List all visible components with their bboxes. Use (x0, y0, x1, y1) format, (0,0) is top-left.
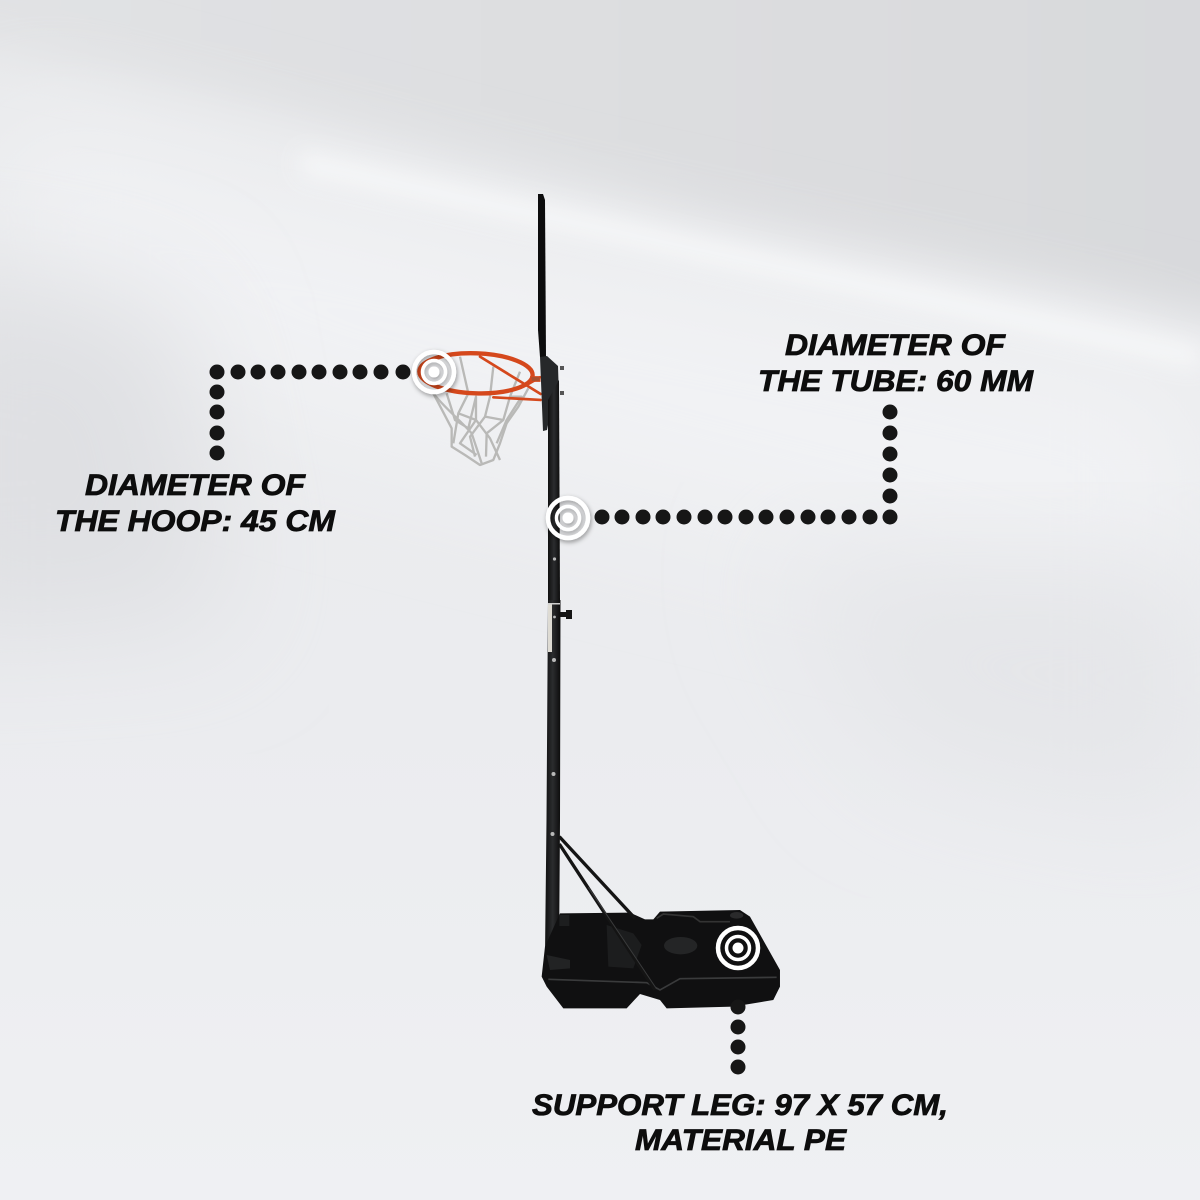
text: hoop diameter: THE HOOP: 45 CM (55, 505, 336, 538)
dotted leader: tube (594, 404, 898, 524)
icon: pole bolts (550, 557, 556, 836)
callout: diameter of the tube (548, 329, 1034, 538)
text: hoop diameter: DIAMETER OF (85, 469, 306, 502)
target marker: support leg (718, 928, 758, 968)
text: tube diameter (758, 329, 1034, 398)
text: tube diameter: DIAMETER OF (785, 329, 1006, 362)
icon: net (433, 357, 528, 465)
text: support leg size and material: MATERIAL PE (635, 1124, 847, 1157)
callout: support leg (532, 928, 948, 1157)
icon: lower pole (545, 600, 560, 955)
text: hoop diameter (55, 469, 336, 538)
icon: support struts (559, 837, 655, 990)
target marker: hoop (414, 352, 454, 392)
icon: weighted base (542, 837, 780, 1008)
text: tube diameter: THE TUBE: 60 MM (758, 365, 1034, 398)
icon: orange rim (419, 351, 541, 400)
dotted leader: hoop (210, 364, 410, 460)
callout: diameter of the hoop (55, 352, 454, 538)
icon: height adjuster knob (560, 610, 572, 619)
basketball hoop product (419, 194, 780, 1008)
text: support leg size and material (532, 1089, 948, 1157)
icon: bracket (540, 356, 559, 431)
text: support leg size and material: SUPPORT LEG: 97 X 57 CM, (532, 1089, 948, 1122)
dotted leader: support leg (730, 1000, 746, 1074)
icon: upper pole (548, 380, 560, 600)
icon: height label sticker (548, 603, 552, 652)
target marker: tube (548, 498, 588, 538)
icon: backboard seen from the side (538, 194, 546, 357)
